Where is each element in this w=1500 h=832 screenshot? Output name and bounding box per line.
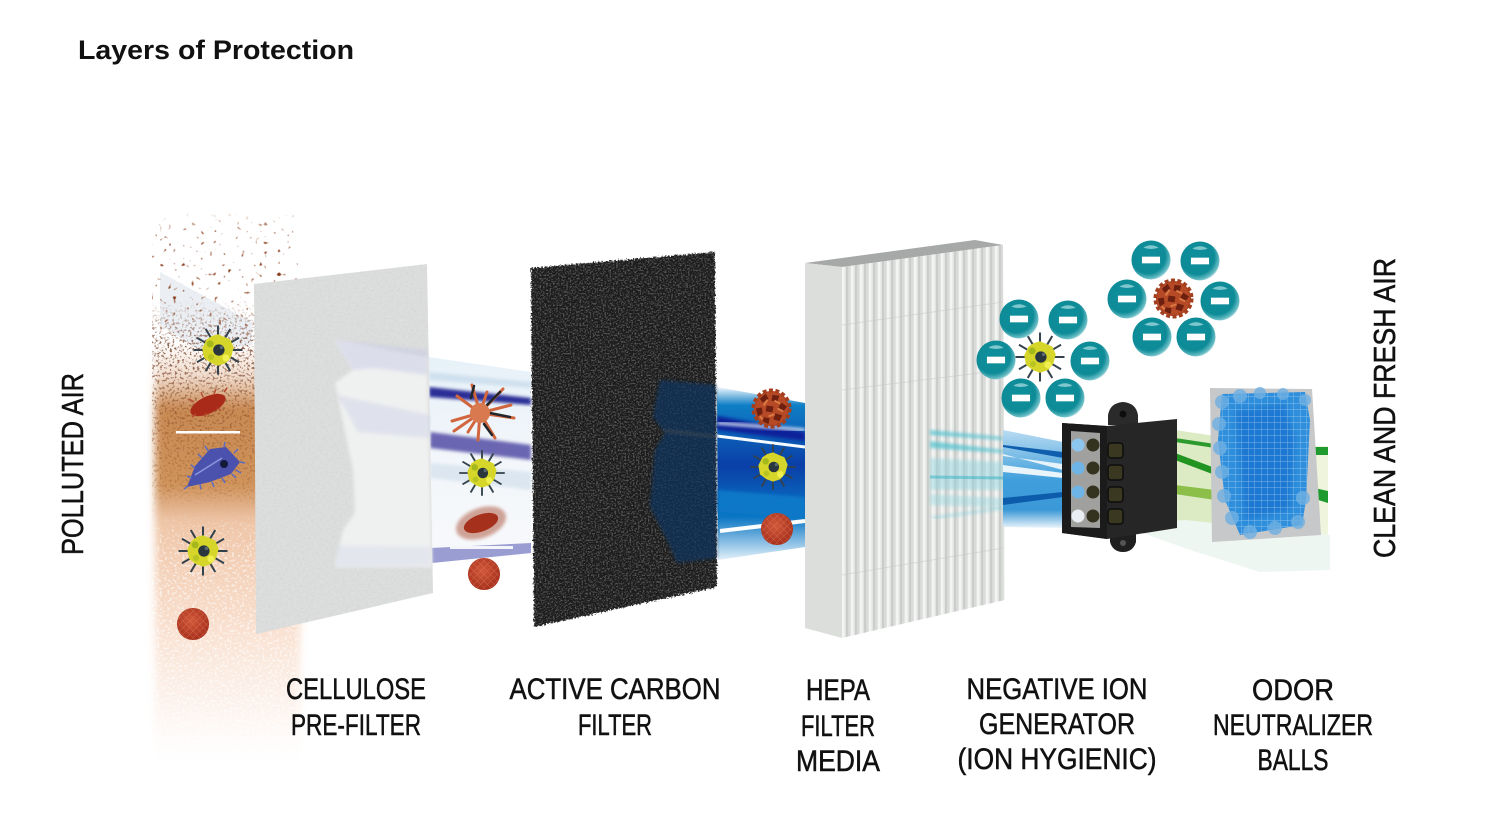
icon: blue dust mite bbox=[184, 442, 245, 489]
icon: rough red virus bbox=[753, 390, 790, 427]
icon: odor neutralizer balls pack bbox=[1210, 387, 1321, 542]
label: active carbon filter: FILTER bbox=[578, 709, 652, 742]
air stream: after carbon filter bbox=[717, 387, 805, 560]
air stream: after HEPA bbox=[1003, 430, 1063, 528]
panel: active carbon filter bbox=[531, 252, 717, 627]
side label: clean and fresh air: CLEAN AND FRESH AIR bbox=[1367, 258, 1402, 558]
label: odor neutralizer balls: NEUTRALIZER bbox=[1213, 709, 1373, 742]
ion cluster around red virus bbox=[1107, 240, 1240, 357]
label: negative ion generator: (ION HYGIENIC) bbox=[958, 743, 1156, 776]
label: active carbon filter bbox=[510, 673, 720, 742]
label: negative ion generator: NEGATIVE ION bbox=[966, 673, 1148, 706]
label: HEPA filter media: HEPA bbox=[806, 674, 870, 707]
label: active carbon filter: ACTIVE CARBON bbox=[510, 673, 720, 706]
label: odor neutralizer balls bbox=[1213, 674, 1373, 777]
title: Layers of Protection bbox=[78, 35, 354, 65]
icon: orange spiked cell bbox=[452, 385, 514, 440]
label: HEPA filter media bbox=[796, 674, 880, 778]
ion cluster around yellow virus bbox=[976, 299, 1110, 418]
air stream: after pre-filter bbox=[428, 357, 531, 590]
icon: fuzzy red mite bbox=[451, 500, 511, 546]
air stream: green after ion generator bbox=[1120, 430, 1330, 572]
icon: red mite bbox=[187, 388, 229, 421]
icon: yellow virus bbox=[750, 444, 796, 490]
icon: yellow virus bbox=[459, 450, 505, 496]
label: negative ion generator: GENERATOR bbox=[979, 708, 1135, 741]
label: negative ion generator bbox=[958, 673, 1156, 776]
icon: red mesh ball bbox=[468, 558, 500, 590]
teal air streaks on HEPA bbox=[930, 430, 1003, 518]
icon: yellow virus top bbox=[194, 326, 242, 374]
label: odor neutralizer balls: ODOR bbox=[1252, 674, 1334, 707]
panel: HEPA filter media bbox=[805, 240, 1005, 638]
icon: red mesh ball bbox=[761, 513, 793, 545]
label: HEPA filter media: MEDIA bbox=[796, 745, 880, 778]
panel: cellulose pre-filter bbox=[254, 264, 433, 634]
side label: polluted air: POLLUTED AIR bbox=[55, 373, 90, 555]
label: HEPA filter media: FILTER bbox=[801, 710, 875, 743]
icon: yellow virus lower bbox=[178, 526, 228, 576]
icon: negative ion generator bbox=[1062, 402, 1177, 552]
label: odor neutralizer balls: BALLS bbox=[1258, 744, 1328, 777]
generator side slots bbox=[1108, 443, 1123, 524]
panel: polluted air dust cloud bbox=[152, 170, 300, 765]
label: cellulose pre-filter bbox=[286, 673, 426, 742]
icon: red mesh ball bbox=[177, 608, 209, 640]
generator holes bbox=[1072, 438, 1100, 522]
label: cellulose pre-filter: PRE-FILTER bbox=[291, 709, 421, 742]
label: cellulose pre-filter: CELLULOSE bbox=[286, 673, 426, 706]
